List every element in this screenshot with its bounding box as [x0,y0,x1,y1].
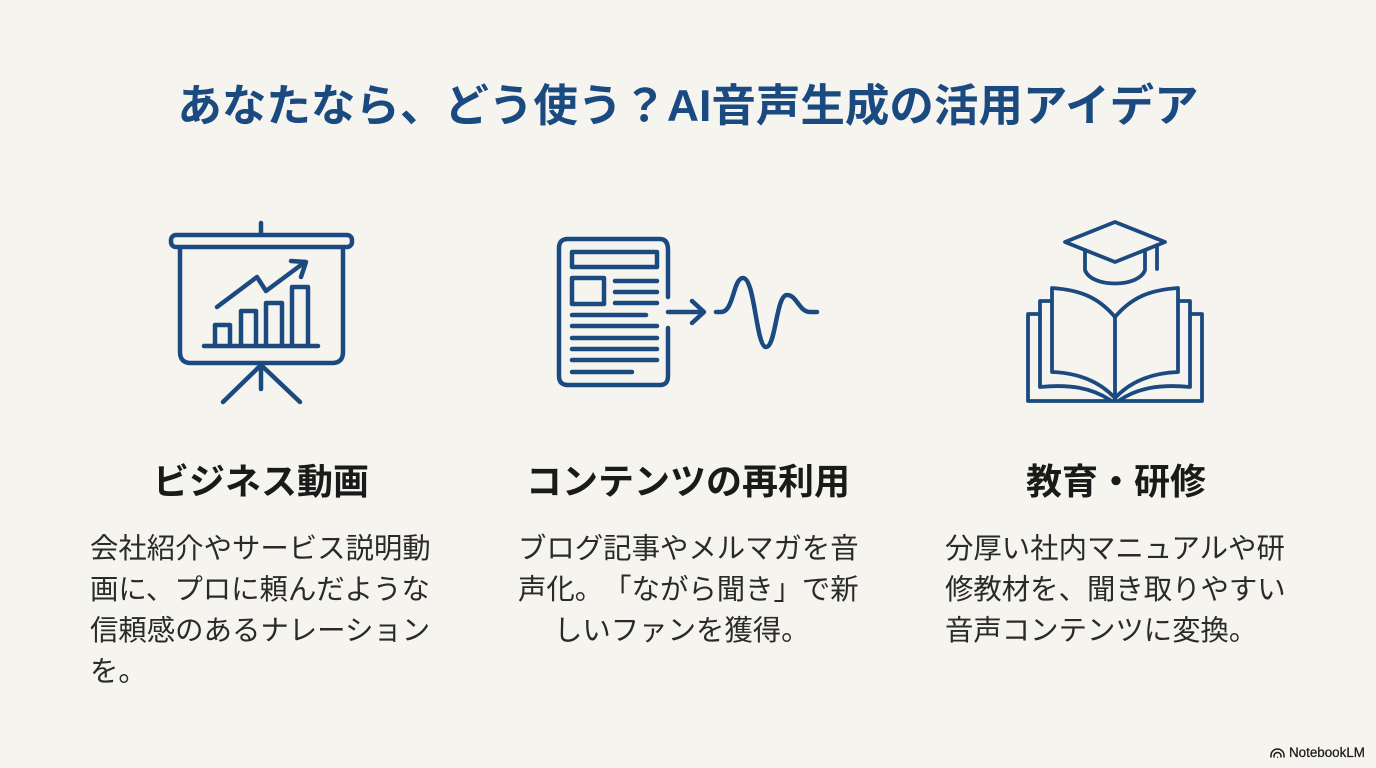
text: education and training description [945,533,1286,647]
text: content reuse description [518,533,859,647]
heading: content reuse: コンテンツの再利用 [526,461,850,502]
icon: presentation screen with rising chart [168,220,354,404]
text: business video description [90,533,431,688]
text: content reuse description: ブログ記事やメルマガを音 [518,533,859,565]
text: business video description: 会社紹介やサービス説明動 [90,533,431,565]
text: content reuse description: 声化。「ながら聞き」で新 [518,574,859,606]
text: business video description: 信頼感のあるナレーション [90,615,430,647]
heading: education and training: 教育・研修 [1026,461,1206,502]
text: education and training description: 音声コンテンツに変換。 [945,615,1257,647]
text: education and training description: 分厚い社内マニュアルや研 [945,533,1285,565]
logo: NotebookLM: NotebookLM [1289,745,1365,760]
icon: document converted to audio wave [556,236,820,388]
text: business video description: 画に、プロに頼んだような [90,574,430,606]
text: business video description: を。 [90,656,147,688]
text: content reuse description: しいファンを獲得。 [554,615,810,647]
heading: business video: ビジネス動画 [153,461,369,502]
title: あなたなら、どう使う？AI音声生成の活用アイデア [177,82,1199,131]
icon: open book with graduation cap [1026,220,1204,403]
text: education and training description: 修教材を、聞き取りやすい [945,574,1286,606]
